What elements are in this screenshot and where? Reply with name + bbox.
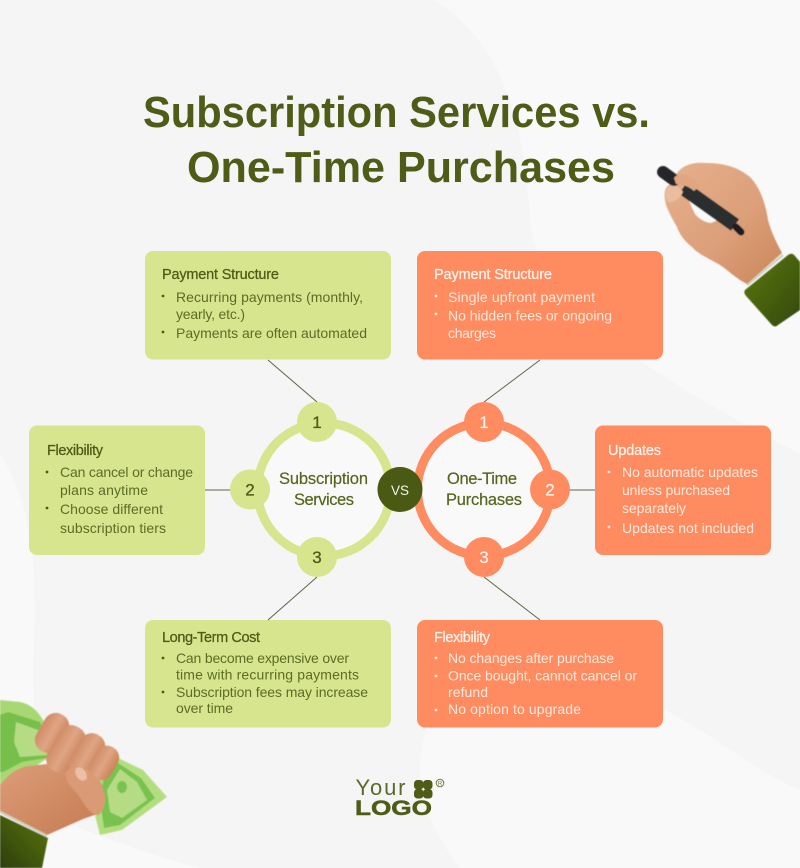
diagram: subscription services ring: 3 [312,548,322,567]
vs badge [378,467,422,512]
panel: flexibility (subscription): plans anytime [60,482,148,498]
diagram: subscription services ring: 2 [245,480,255,500]
panel: payment structure (subscription): Payments are often automated [176,325,367,341]
panel: payment structure (one-time) [417,251,663,360]
panel: payment structure (subscription): yearly, etc.) [176,306,245,322]
panel: long-term cost (subscription): over time [176,700,233,716]
logo [355,775,444,820]
panel: flexibility (subscription): Can cancel or change [60,464,193,480]
panel: flexibility (subscription): subscription tiers [60,520,166,536]
panel: flexibility (one-time): Flexibility [434,630,491,646]
panel: payment structure (subscription): Recurring payments (monthly, [176,289,363,305]
panel: flexibility (one-time): refund [448,684,488,700]
title [143,88,650,192]
panel: updates (one-time): Updates not included [622,520,754,536]
diagram: one-time purchases ring: 2 [545,480,555,500]
diagram: one-time purchases ring: One-Time [447,470,517,488]
panel: payment structure (one-time): No hidden fees or ongoing [448,308,612,324]
panel: payment structure (subscription) [145,251,391,360]
panel: payment structure (subscription): Payment Structure [162,267,279,283]
panel: long-term cost (subscription): time with recurring payments [176,666,359,682]
icon: hand holding pen [663,163,800,326]
title: One-Time Purchases [187,143,615,192]
diagram: subscription services ring: Services [294,491,354,509]
panel: flexibility (subscription): Flexibility [47,443,104,459]
diagram: subscription services ring [230,402,390,577]
connector lines [205,360,595,620]
diagram: one-time purchases ring: 1 [479,413,489,432]
logo: R [438,782,443,788]
panel: updates (one-time): unless purchased [622,482,730,498]
diagram: one-time purchases ring [418,402,570,577]
title: Subscription Services vs. [143,88,650,137]
panel: updates (one-time): No automatic updates [622,464,758,480]
panel: long-term cost (subscription): Long-Term Cost [162,630,260,646]
panel: flexibility (one-time) [417,620,663,728]
panel: payment structure (one-time): Payment Structure [434,267,552,283]
diagram: one-time purchases ring: Purchases [446,491,522,509]
diagram: subscription services ring: 1 [312,413,322,432]
panel: flexibility (one-time): Once bought, cannot cancel or [448,668,637,684]
panel: long-term cost (subscription) [145,620,391,728]
panel: updates (one-time) [595,426,771,555]
panel: updates (one-time): separately [622,500,686,516]
diagram: one-time purchases ring: 3 [479,548,489,567]
panel: flexibility (subscription): Choose different [60,501,163,517]
panel: flexibility (one-time): No changes after purchase [448,650,614,666]
logo: Your [356,775,406,800]
panel: long-term cost (subscription): Can become expensive over [176,650,349,666]
panel: updates (one-time): Updates [608,443,661,459]
icon: hand gripping money [0,700,167,868]
panel: payment structure (one-time): Single upfront payment [448,289,595,305]
panel: flexibility (subscription) [29,426,205,555]
diagram: subscription services ring: Subscription [279,470,368,488]
logo: LOGO [355,796,432,820]
panel: long-term cost (subscription): Subscription fees may increase [176,684,368,700]
panel: flexibility (one-time): No option to upgrade [448,701,581,717]
panel: payment structure (one-time): charges [448,325,496,341]
vs badge: VS [391,483,409,498]
